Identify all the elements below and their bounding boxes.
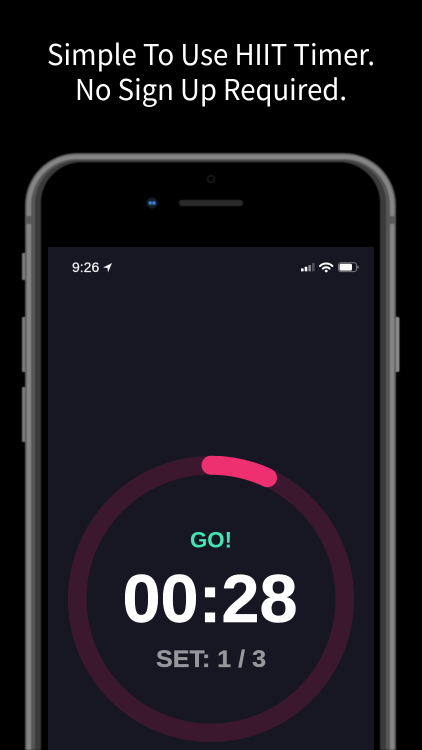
title — [47, 33, 375, 109]
icon: location arrow — [103, 263, 112, 272]
title: Simple To Use HIIT Timer. — [47, 33, 375, 74]
front sensor — [208, 176, 214, 182]
status bar: wifi — [320, 264, 332, 272]
speaker — [179, 200, 243, 206]
status bar: time: 9:26 — [72, 259, 99, 275]
timer ring — [77, 465, 345, 733]
phone body — [22, 153, 399, 750]
status bar: battery — [338, 263, 359, 272]
countdown: 00:28 — [122, 561, 298, 637]
status bar: signal — [301, 263, 315, 271]
go label: GO! — [190, 528, 232, 552]
ring track — [77, 465, 345, 733]
screen — [48, 247, 374, 750]
phone frame — [25, 153, 396, 750]
side buttons — [22, 253, 399, 442]
title: No Sign Up Required. — [75, 68, 347, 109]
camera — [146, 198, 158, 208]
ring progress — [211, 465, 268, 478]
set counter: SET: 1 / 3 — [156, 646, 266, 673]
status bar: time — [72, 259, 112, 275]
